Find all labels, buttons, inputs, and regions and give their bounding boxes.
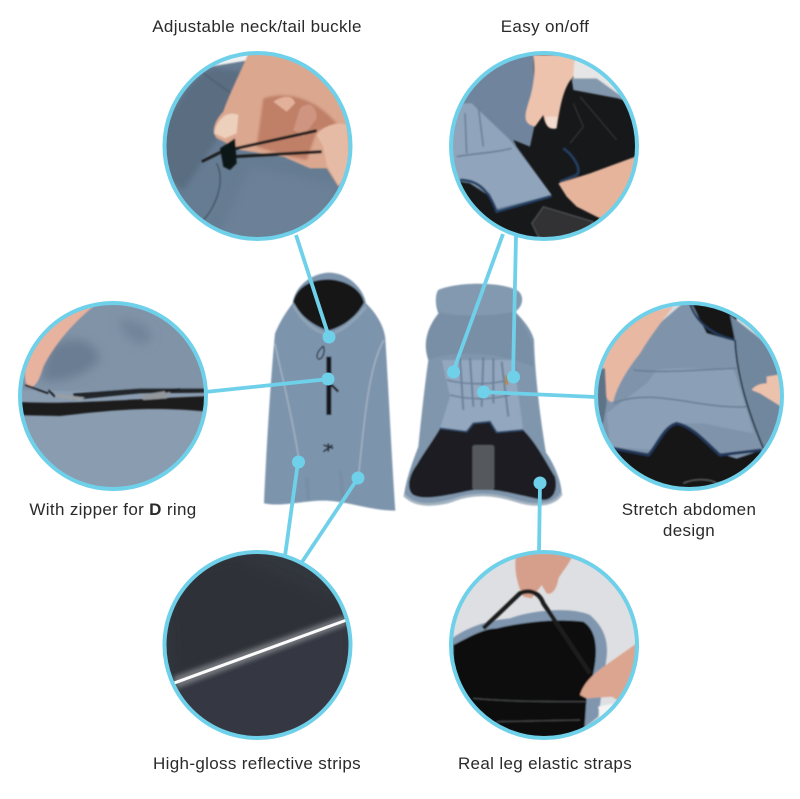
circle detail: elastic strap: [445, 548, 645, 747]
connector lines: [205, 234, 596, 562]
dog coat: inner side view: [404, 284, 562, 506]
callout dots on coats: [292, 330, 546, 490]
dog coat: outer side view: [264, 273, 395, 511]
label: stretch abdomen design: Stretch abdomen: [622, 500, 756, 519]
circle detail: zipper for D ring: [13, 300, 213, 495]
title: easy on/off: Easy on/off: [501, 17, 589, 36]
label: with zipper for D ring: With zipper for D ring: [29, 500, 197, 519]
circle detail: stretch abdomen: [594, 301, 784, 491]
label: high-gloss reflective strips: High-gloss reflective strips: [153, 754, 361, 773]
circle detail: easy on/off: [445, 50, 645, 245]
label: stretch abdomen design: design: [663, 521, 715, 540]
circle detail: neck buckle: [160, 50, 360, 245]
circle detail: reflective strip: [160, 548, 355, 743]
label: real leg elastic straps: Real leg elastic straps: [458, 754, 632, 773]
title: adjustable neck/tail buckle: Adjustable neck/tail buckle: [152, 17, 362, 36]
